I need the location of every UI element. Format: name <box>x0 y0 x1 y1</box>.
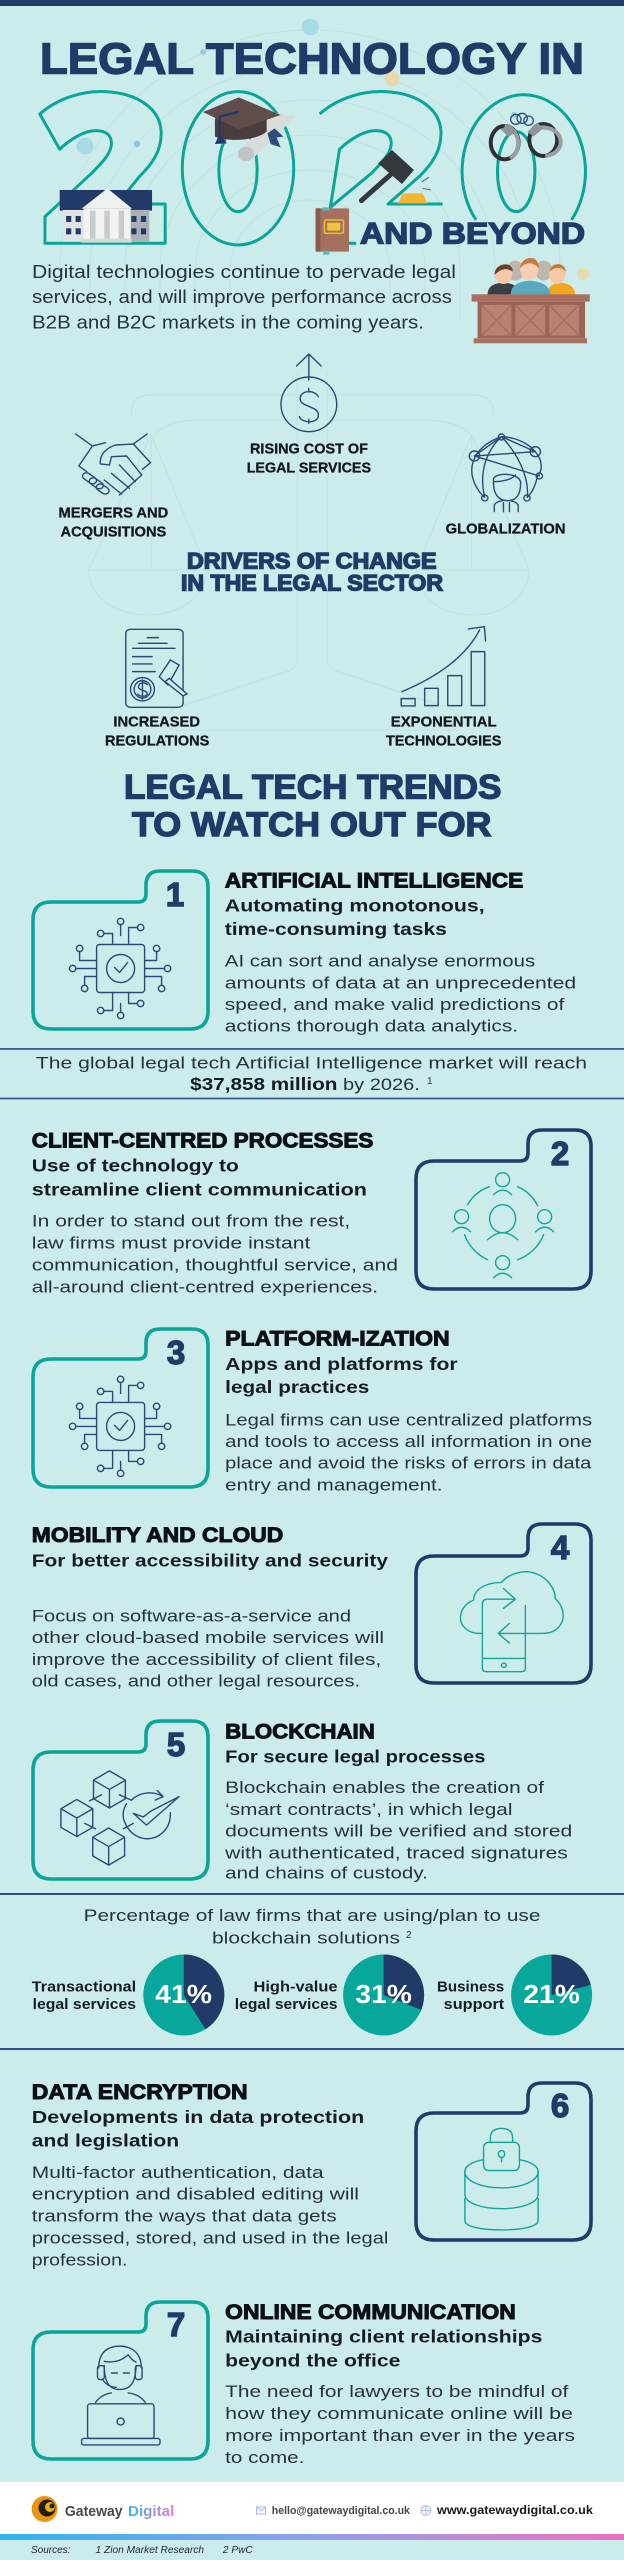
heading: legal tech trends: TO WATCH OUT FOR <box>132 806 491 844</box>
text trend 7: more important than ever in the years <box>225 2426 575 2445</box>
logo: Gateway Digital <box>32 2496 174 2522</box>
callout: AI market: by 2026. <box>343 1075 420 1094</box>
title: And Beyond: AND BEYOND <box>360 217 585 250</box>
pie chart: business support 21%: 21% <box>523 1979 580 2009</box>
pie chart: transactional 41%: 41% <box>155 1979 212 2009</box>
pie chart: high-value 31%: High-value <box>254 1978 338 1995</box>
text trend 1 <box>225 868 576 1036</box>
scales of justice watermark <box>88 373 529 730</box>
pie chart: business support 21%: support <box>444 1996 504 2013</box>
contact details <box>256 2503 593 2517</box>
text trend 2: communication, thoughtful service, and <box>32 1256 398 1275</box>
text trend 5: with authenticated, traced signatures <box>224 1843 568 1862</box>
text trend 2: law firms must provide instant <box>32 1234 311 1253</box>
text trend 2: streamline client communication <box>32 1180 367 1200</box>
text trend 4: For better accessibility and security <box>32 1550 388 1570</box>
panel: trend 6 data encryption <box>32 2080 591 2270</box>
pie chart: high-value 31%: 31% <box>355 1979 412 2009</box>
label: regulations: REGULATIONS <box>105 734 210 750</box>
text trend 1: actions thorough data analytics. <box>225 1017 518 1036</box>
panel: trend 3 platform-ization <box>33 1327 592 1495</box>
text trend 6: DATA ENCRYPTION <box>32 2080 248 2104</box>
icon card 6 <box>416 2083 591 2240</box>
icon card 5: 5 <box>167 1726 185 1763</box>
icon card 1: 1 <box>166 876 184 913</box>
text trend 2 <box>32 1128 398 1296</box>
text trend 2: CLIENT-CENTRED PROCESSES <box>32 1128 373 1152</box>
pie chart: transactional 41%: legal services <box>33 1996 136 2013</box>
pie chart: high-value 31% <box>235 1954 424 2036</box>
sources <box>31 2545 253 2556</box>
logo: Gateway Digital: Digital <box>128 2503 174 2520</box>
heading: drivers of change <box>181 548 443 596</box>
icon card 2: 2 <box>551 1135 569 1172</box>
text trend 3: Apps and platforms for <box>225 1354 458 1374</box>
panel: trend 5 blockchain <box>33 1719 572 1883</box>
text trend 6 <box>32 2080 388 2270</box>
footer <box>0 2482 624 2556</box>
text trend 2: Use of technology to <box>32 1156 239 1176</box>
background concentric arcs and dots <box>60 18 589 320</box>
panel: trend 2 client-centred processes <box>32 1128 591 1296</box>
icon card 3 <box>33 1329 208 1487</box>
text trend 3: PLATFORM-IZATION <box>225 1327 450 1351</box>
title: Legal Technology in: LEGAL TECHNOLOGY IN <box>40 34 584 83</box>
icon: exponential chart <box>401 627 486 706</box>
label: regulations: INCREASED <box>113 715 200 731</box>
panel: blockchain adoption statistics <box>0 1893 624 2050</box>
stat heading <box>84 1906 540 1948</box>
icon: courthouse <box>60 188 152 243</box>
text trend 1: ARTIFICIAL INTELLIGENCE <box>225 868 523 892</box>
label: mergers <box>58 506 168 541</box>
heading: drivers of change: DRIVERS OF CHANGE <box>187 548 436 573</box>
sources: Sources: <box>31 2545 71 2556</box>
text trend 7: to come. <box>225 2448 304 2467</box>
label: exponential <box>386 715 502 750</box>
text trend 4: old cases, and other legal resources. <box>32 1672 360 1691</box>
text trend 1: time-consuming tasks <box>225 919 447 939</box>
top navy bar <box>0 0 624 6</box>
icon card 3: 3 <box>167 1334 185 1371</box>
icon card 4 <box>416 1524 591 1683</box>
intro text: Digital technologies continue to pervade legal <box>32 262 456 282</box>
text trend 1: Automating monotonous, <box>225 896 485 916</box>
text trend 3: and tools to access all information in one <box>225 1432 592 1451</box>
icon card 2 <box>416 1130 591 1289</box>
stat heading: 2 <box>406 1930 412 1941</box>
text trend 7: Maintaining client relationships <box>225 2327 543 2347</box>
text trend 7 <box>225 2300 575 2467</box>
title: 2020 outlined numerals <box>40 92 585 245</box>
text trend 5: For secure legal processes <box>225 1747 486 1767</box>
icon: rising cost dollar <box>281 354 337 432</box>
text trend 2: all-around client-centred experiences. <box>32 1277 378 1296</box>
contact details: www.gatewaydigital.co.uk <box>436 2503 593 2517</box>
callout: AI market <box>0 1048 624 1099</box>
text trend 3 <box>225 1327 592 1495</box>
heading: drivers of change: IN THE LEGAL SECTOR <box>181 571 443 596</box>
text trend 5 <box>224 1719 572 1883</box>
sources: 1 Zion Market Research <box>96 2545 205 2556</box>
icon card 7 <box>33 2302 208 2459</box>
stat heading: blockchain solutions <box>212 1929 400 1948</box>
intro text: services, and will improve performance across <box>32 287 452 307</box>
text trend 6: profession. <box>32 2250 127 2270</box>
text trend 6: transform the ways that data gets <box>32 2207 337 2226</box>
icon: law book <box>316 207 349 255</box>
label: regulations <box>105 715 210 750</box>
pie chart: transactional 41% <box>32 1954 224 2036</box>
icon: globalization <box>469 434 542 512</box>
text trend 4: other cloud-based mobile services will <box>32 1628 384 1647</box>
sources: 2 PwC <box>222 2545 253 2556</box>
callout: AI market: 1 <box>427 1076 433 1087</box>
pie chart: high-value 31%: legal services <box>235 1996 338 2013</box>
icon card 1 <box>33 871 208 1029</box>
intro text <box>32 262 456 332</box>
panel: drivers of change <box>58 354 566 750</box>
text trend 6: Developments in data protection <box>32 2107 364 2127</box>
text trend 5: and chains of custody. <box>225 1864 428 1883</box>
text trend 7: how they communicate online will be <box>225 2404 573 2423</box>
text trend 6: processed, stored, and used in the legal <box>32 2228 388 2247</box>
text trend 3: legal practices <box>225 1377 370 1397</box>
icon card 7: 7 <box>167 2306 185 2343</box>
heading: legal tech trends <box>124 768 501 844</box>
text trend 2: In order to stand out from the rest, <box>32 1212 350 1231</box>
panel: trend 4 mobility and cloud <box>32 1523 591 1691</box>
panel: trend 7 online communication <box>33 2300 575 2467</box>
text trend 5: documents will be verified and stored <box>225 1822 572 1841</box>
icon: gavel <box>361 150 431 203</box>
callout: AI market: $37,858 million <box>190 1074 337 1094</box>
text trend 7: ONLINE COMMUNICATION <box>225 2300 516 2324</box>
pie chart: business support 21%: Business <box>437 1978 504 1995</box>
pie chart: business support 21% <box>437 1954 592 2036</box>
icon: handcuffs <box>491 113 561 159</box>
text trend 6: encryption and disabled editing will <box>32 2185 359 2204</box>
label: rising cost <box>247 441 371 476</box>
heading: legal tech trends: LEGAL TECH TRENDS <box>124 768 501 806</box>
text trend 5: BLOCKCHAIN <box>225 1719 375 1743</box>
pie chart: transactional 41%: Transactional <box>32 1978 136 1995</box>
icon card 5 <box>33 1721 208 1879</box>
panel: trend 1 artificial intelligence <box>33 868 576 1036</box>
icon: graduation cap and diploma <box>203 97 295 161</box>
label: mergers: MERGERS AND <box>58 506 168 522</box>
text trend 6: Multi-factor authentication, data <box>32 2163 324 2182</box>
text trend 6: and legislation <box>32 2131 179 2151</box>
intro text: B2B and B2C markets in the coming years. <box>32 312 424 332</box>
icon: handshake <box>76 434 150 495</box>
text trend 3: Legal firms can use centralized platforms <box>225 1410 592 1429</box>
label: rising cost: LEGAL SERVICES <box>247 460 371 476</box>
label: exponential: TECHNOLOGIES <box>386 734 502 750</box>
text trend 1: amounts of data at an unprecedented <box>225 973 576 992</box>
contact details: hello@gatewaydigital.co.uk <box>272 2505 411 2517</box>
text trend 4: MOBILITY AND CLOUD <box>32 1523 283 1547</box>
text trend 5: Blockchain enables the creation of <box>225 1778 544 1797</box>
label: rising cost: RISING COST OF <box>250 441 368 457</box>
text trend 4: Focus on software-as-a-service and <box>32 1607 351 1626</box>
label: mergers: ACQUISITIONS <box>60 525 167 541</box>
stat heading: Percentage of law firms that are using/plan to use <box>84 1906 540 1925</box>
label: globalization: GLOBALIZATION <box>446 521 566 537</box>
text trend 1: speed, and make valid predictions of <box>225 995 565 1014</box>
label: exponential: EXPONENTIAL <box>391 715 497 731</box>
callout: AI market: The global legal tech Artificial Intelligence market will reach <box>36 1053 587 1072</box>
logo: Gateway Digital: Gateway <box>65 2503 123 2520</box>
text trend 7: The need for lawyers to be mindful of <box>225 2382 569 2401</box>
text trend 3: entry and management. <box>225 1476 442 1495</box>
text trend 3: place and avoid the risks of errors in data <box>225 1454 592 1472</box>
text trend 1: AI can sort and analyse enormous <box>225 952 535 971</box>
icon: jury box <box>472 258 590 343</box>
text trend 7: beyond the office <box>225 2350 401 2370</box>
text trend 4 <box>32 1523 388 1691</box>
icon card 6: 6 <box>551 2087 569 2124</box>
text trend 4: improve the accessibility of client files, <box>32 1650 381 1669</box>
icon card 4: 4 <box>551 1529 570 1566</box>
icon: regulations document <box>126 629 187 707</box>
text trend 5: ‘smart contracts’, in which legal <box>225 1800 512 1819</box>
